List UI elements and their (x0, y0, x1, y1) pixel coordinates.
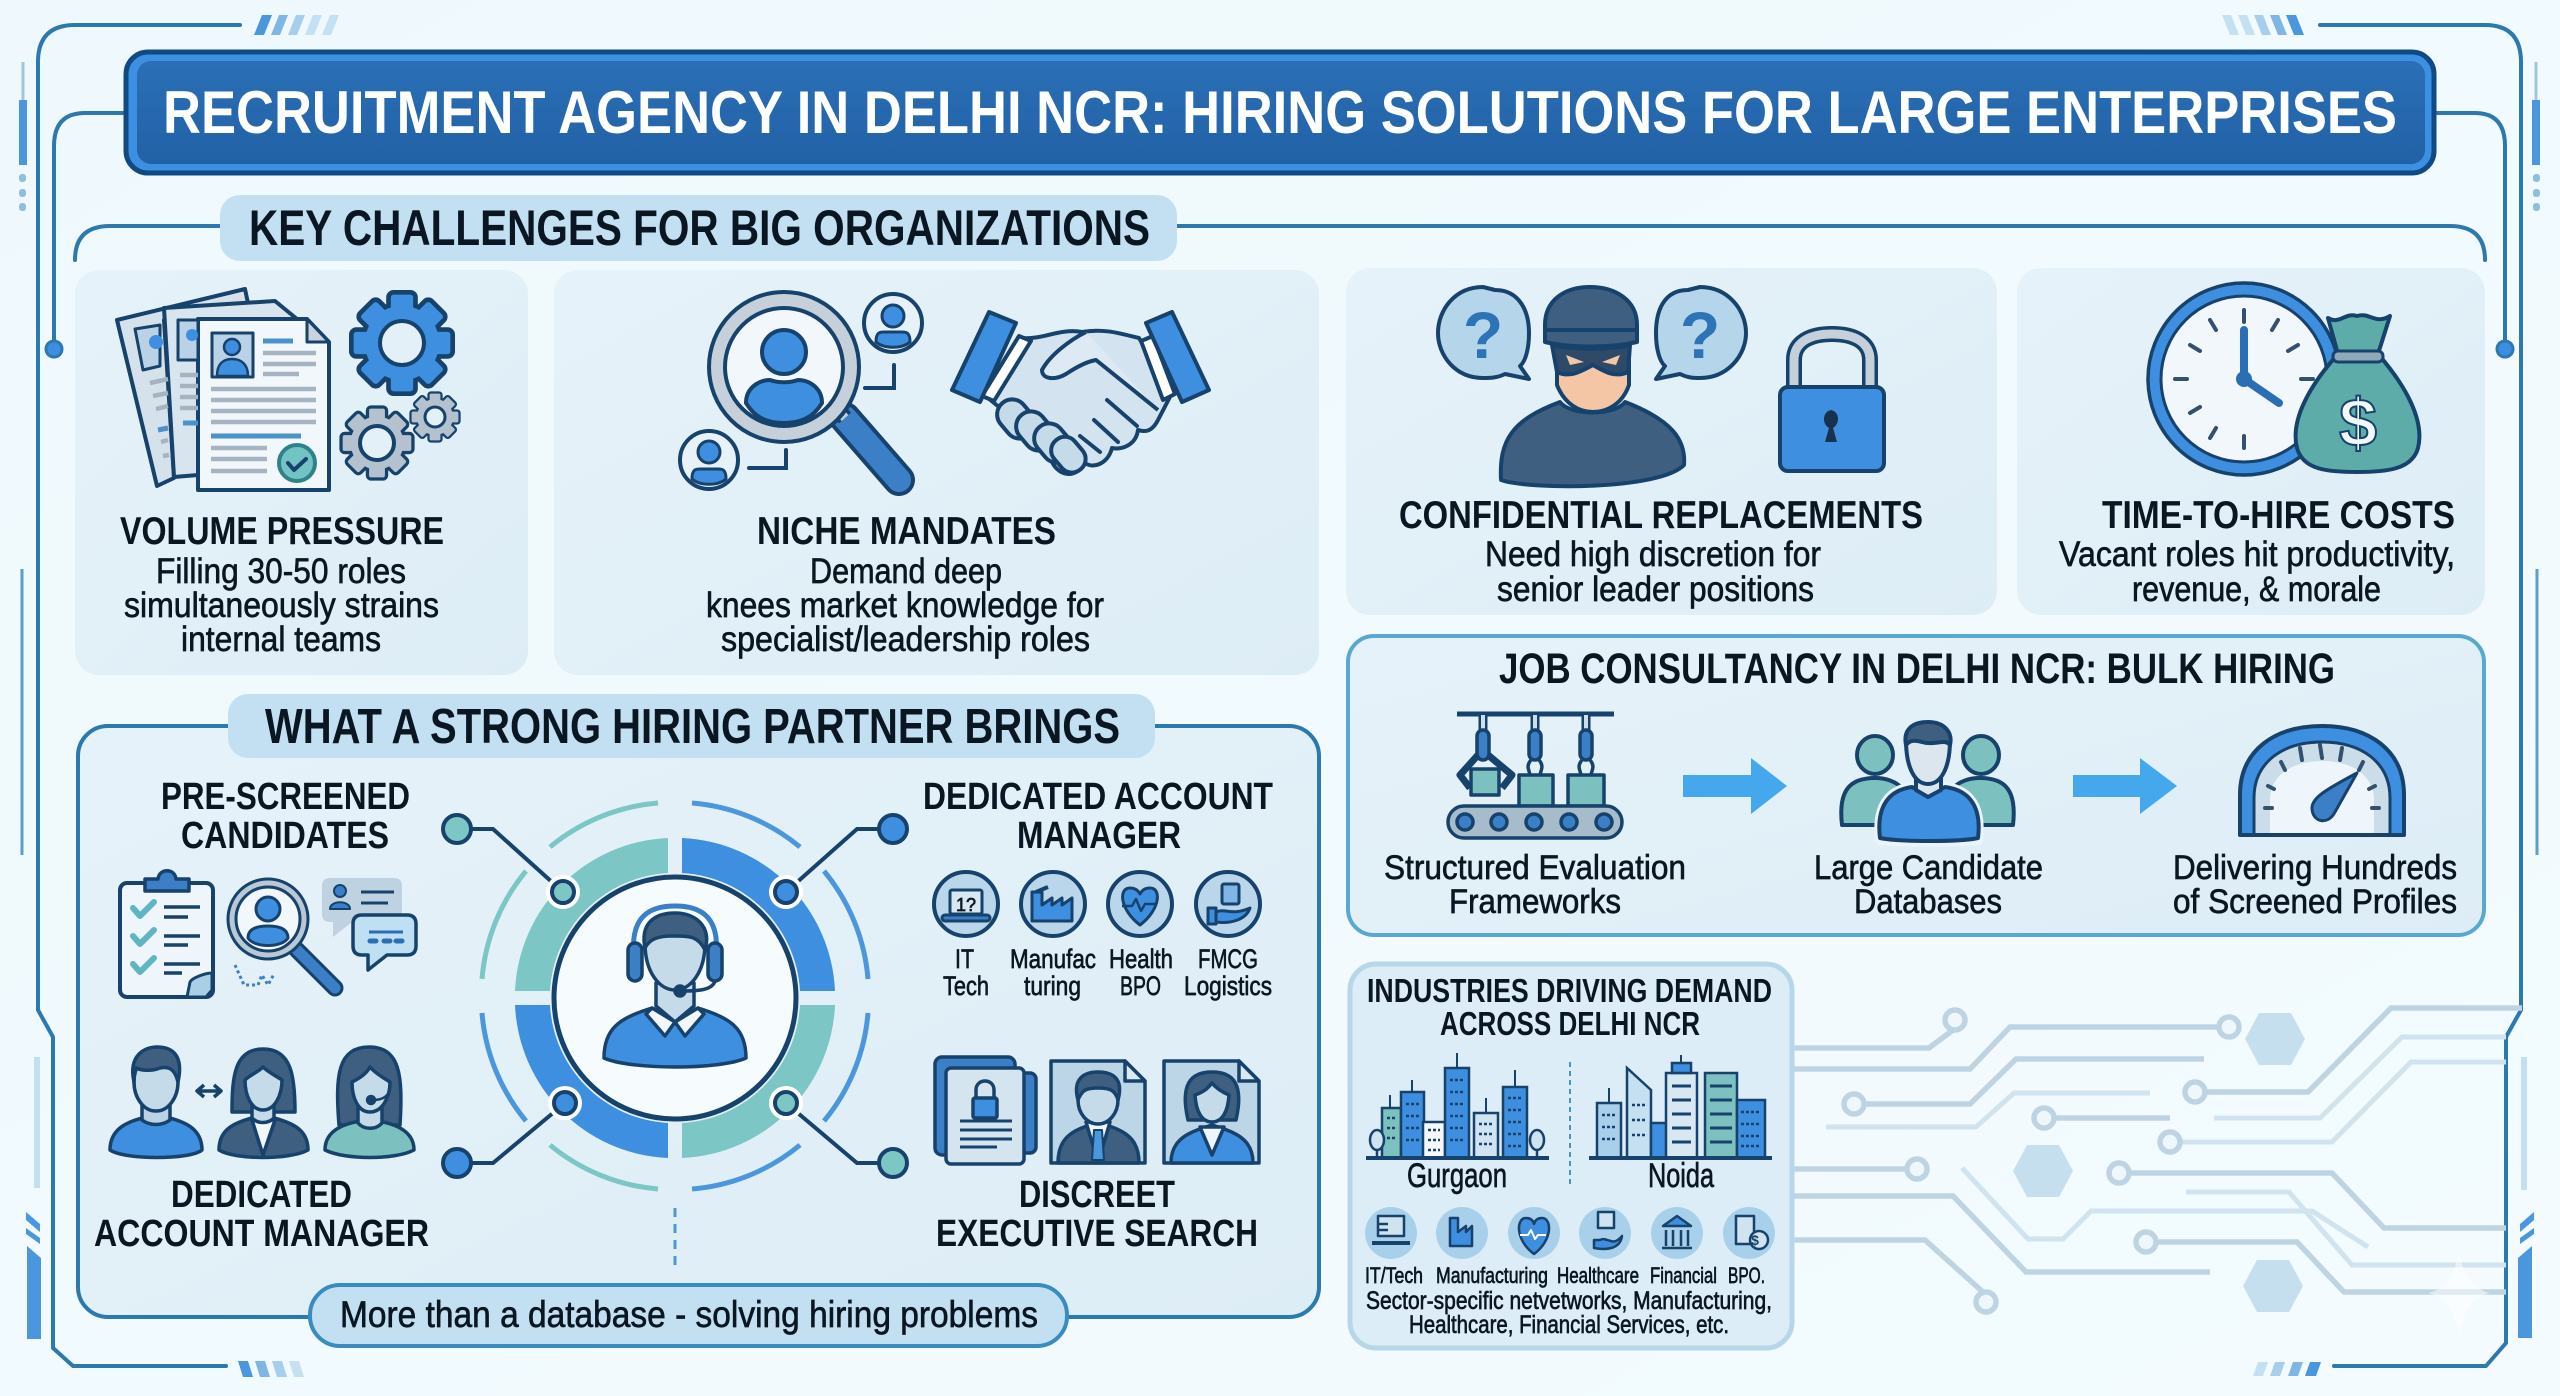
industry labels: Financial (1650, 1263, 1717, 1288)
industry labels: IT/Tech (1365, 1263, 1423, 1288)
arrow (1683, 758, 1787, 814)
heading: dedicated account manager right: DEDICATED ACCOUNT (923, 776, 1273, 818)
dashed connector (674, 1208, 676, 1270)
icon: confidential files and executives (935, 1057, 1259, 1164)
text: volume pressure: internal teams (181, 620, 381, 659)
icon: three people (110, 1047, 414, 1158)
question marks: ? (1680, 298, 1720, 372)
icon: conveyor (1448, 714, 1622, 838)
heading: industries: INDUSTRIES DRIVING DEMAND (1367, 972, 1772, 1009)
icon: checklist, magnifier, chat (120, 871, 416, 997)
text: time-to-hire costs: revenue, & morale (2132, 570, 2381, 609)
industry labels: BPO. (1728, 1263, 1765, 1288)
text: niche mandates: knees market knowledge for (706, 586, 1104, 625)
industries note (1366, 1287, 1772, 1339)
city labels (1407, 1157, 1714, 1195)
text: sector labels: Logistics (1184, 971, 1272, 1001)
industries note: Healthcare, Financial Services, etc. (1409, 1311, 1729, 1339)
text: niche mandates: specialist/leadership roles (721, 620, 1090, 659)
panel: volume pressure (75, 270, 528, 675)
text: confidential replacements: CONFIDENTIAL REPLACEMENTS (1399, 494, 1923, 537)
panel: job consultancy bulk hiring (1348, 636, 2484, 935)
text: volume pressure: Filling 30-50 roles (156, 552, 406, 591)
section heading: key challenges: KEY CHALLENGES FOR BIG ORGANIZATIONS (249, 200, 1150, 256)
text: sector labels: BPO (1120, 971, 1161, 1001)
icons: sector circles (934, 872, 1260, 936)
text: volume pressure (120, 510, 444, 659)
city labels: Gurgaon (1407, 1157, 1507, 1195)
panel: what a strong hiring partner brings (78, 694, 1319, 1346)
icon: gurgaon skyline (1366, 1053, 1549, 1158)
industry icons row (1365, 1207, 1775, 1259)
industry icons row: $ (1751, 1232, 1759, 1248)
icon: stacked resumes (117, 289, 329, 490)
panel: industries driving demand (1350, 964, 1792, 1348)
text: process labels: Frameworks (1449, 883, 1621, 921)
text: time-to-hire costs: TIME-TO-HIRE COSTS (2102, 494, 2455, 537)
text: sector labels: Tech (943, 971, 989, 1001)
hub diagram (443, 803, 907, 1189)
center circle (554, 877, 796, 1119)
divider (1569, 1062, 1571, 1187)
heading: dedicated account manager: DEDICATED (171, 1174, 352, 1216)
text: time-to-hire costs (2059, 494, 2455, 609)
text: niche mandates (706, 510, 1104, 659)
text: sector labels: IT (955, 944, 974, 974)
heading: dedicated account manager (94, 1174, 429, 1255)
industry labels: Manufacturing (1436, 1263, 1548, 1288)
ring segments (515, 838, 835, 1158)
arrow (2073, 758, 2177, 814)
text: confidential replacements (1399, 494, 1923, 609)
icon: magnifier with candidates (680, 292, 922, 489)
text: process labels: Large Candidate (1814, 849, 2043, 887)
panel: niche mandates (554, 270, 1319, 675)
outer arcs (482, 803, 868, 1189)
text: volume pressure: VOLUME PRESSURE (120, 510, 444, 553)
heading: industries: ACROSS DELHI NCR (1440, 1005, 1700, 1042)
text: sector labels: Health (1109, 944, 1173, 974)
icon: candidates group (1841, 722, 2014, 842)
icon: clock and money bag (2148, 283, 2419, 475)
heading: discreet executive search: EXECUTIVE SEARCH (936, 1213, 1258, 1255)
text: it tech label in icon: 1? (956, 895, 976, 915)
icon: noida skyline (1589, 1055, 1772, 1158)
heading: pre-screened candidates: CANDIDATES (181, 815, 389, 857)
text: time-to-hire costs: Vacant roles hit productivity, (2059, 535, 2455, 574)
callout pill: More than a database - solving hiring problems (340, 1294, 1038, 1335)
text: process labels: Delivering Hundreds (2173, 849, 2457, 887)
icon: handshake (952, 312, 1209, 478)
text: process labels (1384, 849, 2457, 921)
callout pill (310, 1285, 1067, 1346)
panel: time-to-hire costs (2017, 268, 2485, 615)
industry labels (1365, 1263, 1765, 1288)
industry labels: Healthcare (1557, 1263, 1639, 1288)
title banner (126, 52, 2434, 173)
text: sector labels: turing (1024, 971, 1081, 1001)
icon: headset agent (604, 906, 746, 1067)
text: process labels: Databases (1854, 883, 2002, 921)
heading: dedicated account manager right (923, 776, 1273, 857)
panel: confidential replacements (1346, 268, 1997, 615)
heading: industries (1367, 972, 1772, 1042)
heading: dedicated account manager: ACCOUNT MANAGER (94, 1213, 429, 1255)
text: niche mandates: Demand deep (810, 552, 1002, 591)
text: sector labels: FMCG (1198, 944, 1258, 974)
text: sector labels (943, 944, 1272, 1001)
icon: masked person and lock (1438, 287, 1884, 486)
question marks (1463, 298, 1720, 372)
heading: discreet executive search (936, 1174, 1258, 1255)
text: niche mandates: NICHE MANDATES (757, 510, 1056, 553)
heading: pre-screened candidates (161, 776, 410, 857)
icon: gears (343, 295, 458, 477)
text: confidential replacements: senior leader positions (1497, 570, 1814, 609)
city labels: Noida (1648, 1157, 1714, 1195)
text: process labels: Structured Evaluation (1384, 849, 1686, 887)
text: process labels: of Screened Profiles (2173, 883, 2457, 921)
icon: speed gauge (2240, 726, 2404, 835)
section heading: key challenges (75, 195, 2485, 261)
text: sector labels: Manufac (1010, 944, 1096, 974)
question marks: ? (1463, 298, 1503, 372)
heading: pre-screened candidates: PRE-SCREENED (161, 776, 410, 818)
heading pill: WHAT A STRONG HIRING PARTNER BRINGS (265, 700, 1120, 754)
connector nodes (443, 815, 907, 1177)
industries note: Sector-specific netvetworks, Manufacturing, (1366, 1287, 1772, 1315)
dollar sign: $ (2339, 385, 2377, 461)
heading: job consultancy: JOB CONSULTANCY IN DELHI NCR: BULK HIRING (1499, 645, 2335, 693)
heading: dedicated account manager right: MANAGER (1017, 815, 1181, 857)
heading: discreet executive search: DISCREET (1019, 1174, 1175, 1216)
decorative circuit traces (1794, 1008, 2522, 1336)
text: confidential replacements: Need high discretion for (1485, 535, 1821, 574)
text: volume pressure: simultaneously strains (124, 586, 439, 625)
